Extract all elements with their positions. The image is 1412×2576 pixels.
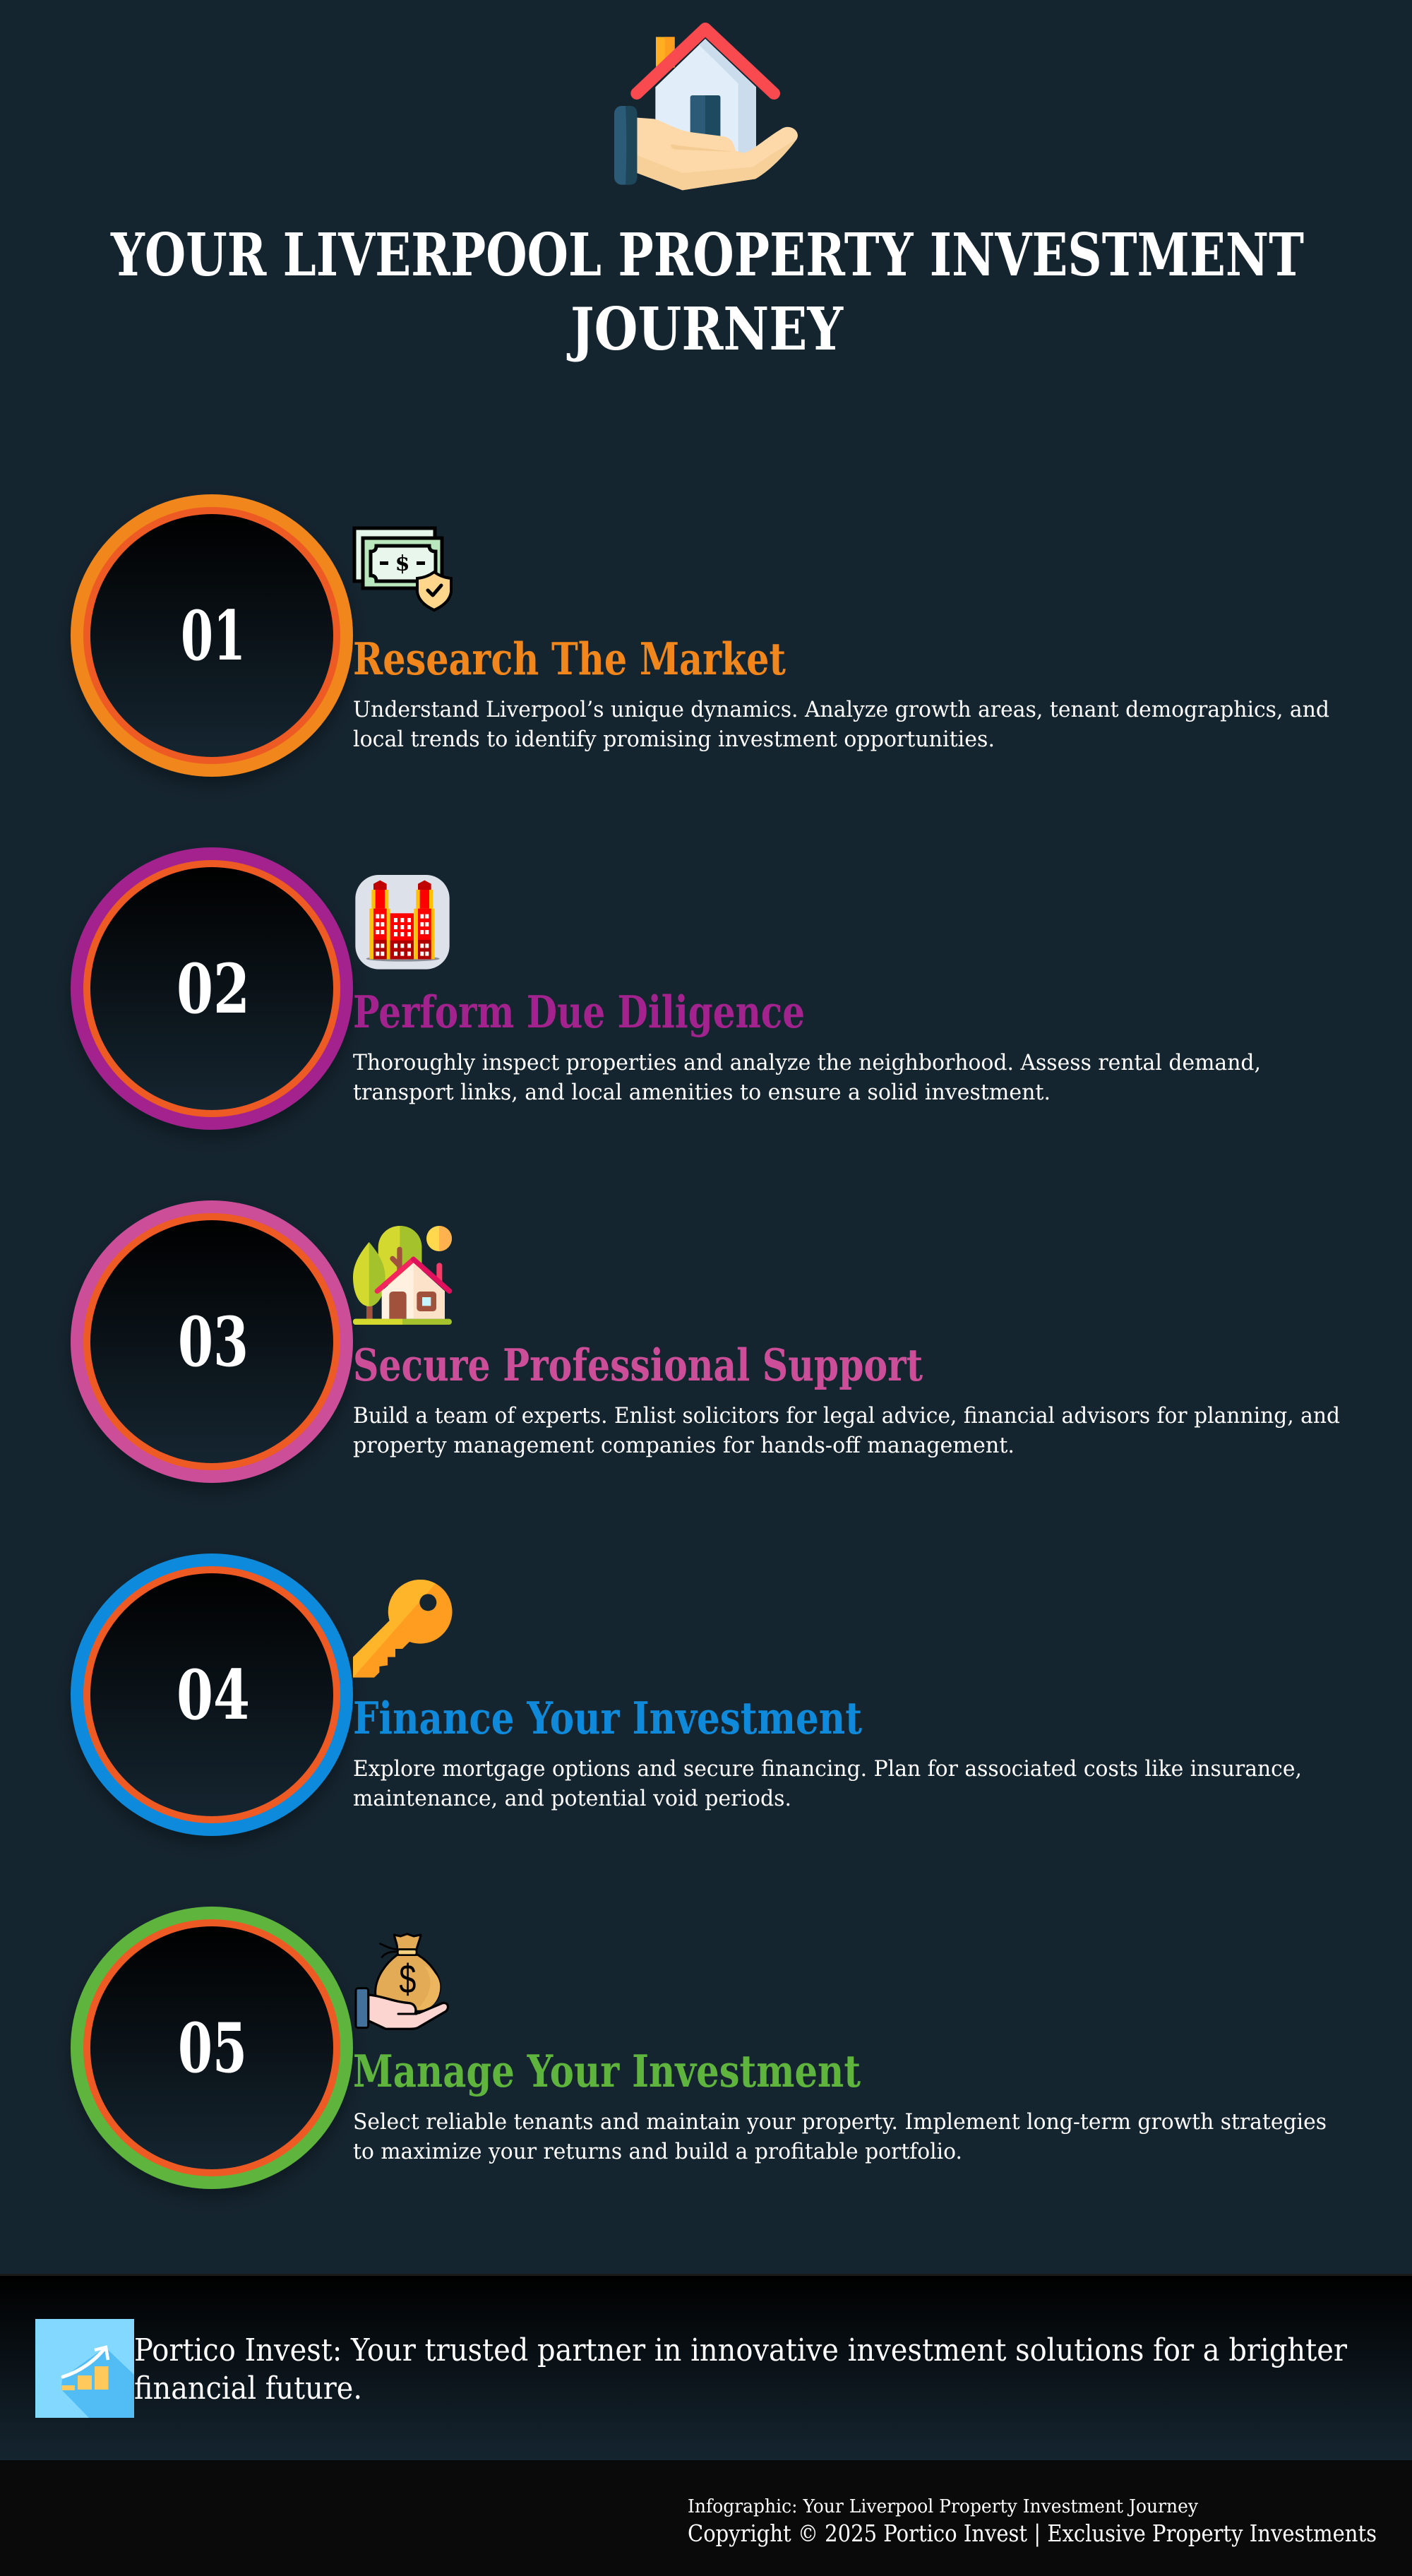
number circle 01: 01 <box>181 596 246 676</box>
number circle 05 <box>71 1907 353 2189</box>
description <box>353 1050 1261 1105</box>
number circle 02: 02 <box>176 949 250 1029</box>
icon: growth chart logo <box>35 2319 134 2418</box>
description: Explore mortgage options and secure financing. Plan for associated costs like insurance, <box>353 1756 1302 1782</box>
panel: step 04 <box>71 1554 1302 1836</box>
number circle 04: 04 <box>176 1655 250 1735</box>
description <box>353 697 1329 752</box>
icon: key <box>353 1580 453 1678</box>
panel: step 01 <box>71 494 1329 777</box>
number circle 01 <box>71 494 353 777</box>
number circle 04 <box>71 1554 353 1836</box>
footer: Infographic: Your Liverpool Property Investment Journey <box>688 2496 1198 2517</box>
description: to maximize your returns and build a profitable portfolio. <box>353 2139 962 2164</box>
title <box>110 220 1304 364</box>
number circle 03: 03 <box>178 1302 249 1382</box>
description: property management companies for hands-off management. <box>353 1433 1015 1458</box>
icon: hand holding money bag: $ <box>399 1957 416 2002</box>
heading: Research The Market <box>353 633 786 685</box>
icon: hand holding money bag <box>356 1934 448 2029</box>
description: maintenance, and potential void periods. <box>353 1786 791 1811</box>
description: local trends to identify promising investment opportunities. <box>353 727 995 752</box>
description: Select reliable tenants and maintain your property. Implement long-term growth strategies <box>353 2109 1327 2135</box>
description <box>353 1756 1302 1811</box>
heading: Secure Professional Support <box>353 1339 923 1391</box>
icon: banknotes with shield <box>354 528 451 610</box>
description: Thoroughly inspect properties and analyze the neighborhood. Assess rental demand, <box>353 1050 1261 1075</box>
icon: banknotes with shield: $ <box>395 551 409 576</box>
number circle 02 <box>71 847 353 1130</box>
description: Build a team of experts. Enlist solicitors for legal advice, financial advisors for planning, and <box>353 1403 1340 1429</box>
company statement: financial future. <box>134 2371 362 2407</box>
heading: Finance Your Investment <box>353 1692 862 1744</box>
footer <box>0 2460 1412 2576</box>
panel: step 02 <box>71 847 1261 1130</box>
heading: Perform Due Diligence <box>353 986 805 1038</box>
heading: Manage Your Investment <box>353 2045 861 2097</box>
number circle 03 <box>71 1200 353 1483</box>
title: JOURNEY <box>566 294 844 364</box>
panel: step 03 <box>71 1200 1340 1483</box>
company statement <box>134 2332 1348 2407</box>
panel: step 05 <box>71 1907 1327 2189</box>
description <box>353 2109 1327 2164</box>
icon: hand holding house <box>614 29 798 190</box>
description: transport links, and local amenities to ensure a solid investment. <box>353 1080 1051 1105</box>
panel: company band <box>0 2274 1412 2460</box>
number circle 05: 05 <box>178 2008 247 2088</box>
icon: house with trees and sun <box>353 1226 452 1325</box>
description <box>353 1403 1340 1458</box>
icon: red building <box>355 875 450 970</box>
description: Understand Liverpool’s unique dynamics. Analyze growth areas, tenant demographics, and <box>353 697 1329 722</box>
